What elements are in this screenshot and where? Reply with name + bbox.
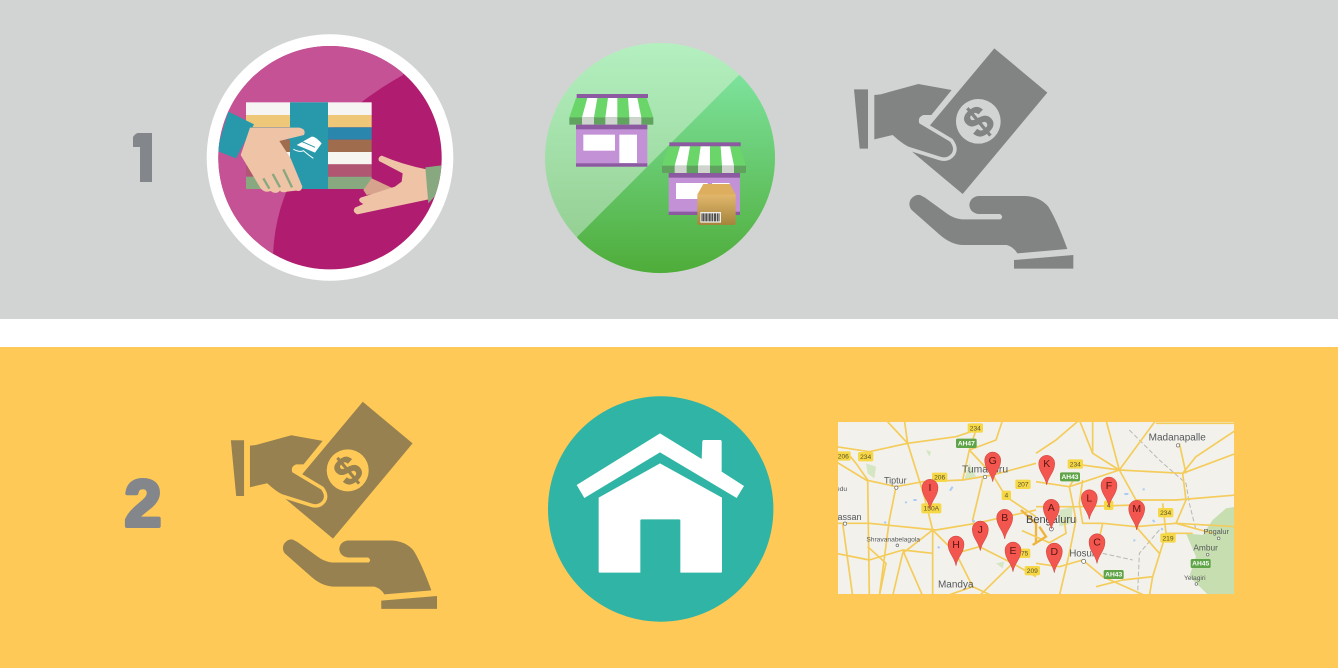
map shields and labels east: Pogalur <box>1204 527 1229 536</box>
map shields and labels west: 209 <box>1027 568 1038 575</box>
map pin B: B <box>1001 512 1008 524</box>
map shields and labels west: AH47 <box>958 441 975 448</box>
map pin M: M <box>1132 503 1141 515</box>
map pin H: H <box>952 539 960 551</box>
map shields and labels west: 234 <box>860 454 872 461</box>
map shields and labels east: AH43 <box>1105 572 1122 579</box>
map shields and labels east: Yelagiri <box>1184 575 1206 582</box>
map shields and labels west: Hassan <box>831 512 861 522</box>
map pin E: E <box>1009 545 1017 557</box>
map shields and labels west: Tumakuru <box>962 464 1008 475</box>
map pin A: A <box>1048 502 1055 514</box>
panel: top grey band <box>0 0 1338 319</box>
step number 1: 1 <box>126 119 164 197</box>
map shields and labels east: Bengaluru <box>1026 514 1076 526</box>
map shields and labels east: 234 <box>1070 461 1081 468</box>
map pin F: F <box>1106 480 1112 492</box>
map shields and labels east: AH45 <box>1192 561 1209 568</box>
map roads east <box>1022 420 1236 596</box>
map shields and labels west: 150A <box>924 506 940 513</box>
storefront: right <box>662 142 746 215</box>
map shields and labels west: 206 <box>838 453 849 460</box>
map pin I: I <box>929 482 931 494</box>
icon: house in teal circle <box>548 396 773 622</box>
map pin J <box>972 521 988 551</box>
parcel with barcode <box>697 184 736 225</box>
map shields and labels west: Mandya <box>938 580 974 591</box>
map shields and labels east <box>1026 433 1229 585</box>
map pin D <box>1046 543 1062 573</box>
icon: money passing between hands (yellow band): $ <box>326 447 371 495</box>
map shields and labels west: 206 <box>934 475 946 482</box>
map roads west <box>836 420 1036 596</box>
map shields and labels west: edu <box>836 486 847 493</box>
storefront: left <box>569 94 653 167</box>
map shields and labels west: Shravanabelagola <box>866 537 920 544</box>
panel: bottom yellow band <box>0 347 1338 668</box>
map pin H <box>948 536 964 566</box>
map pin E <box>1005 542 1021 572</box>
map pin K: K <box>1043 458 1050 470</box>
map shields and labels east: Hosur <box>1069 549 1096 560</box>
map pin K <box>1039 455 1055 485</box>
map shields and labels east: AH43 <box>1061 474 1079 481</box>
map pin B <box>997 509 1013 539</box>
icon: hands exchanging parcel <box>207 34 453 281</box>
map pin F <box>1101 477 1117 507</box>
map shields and labels west: 4 <box>1004 493 1008 500</box>
map pin C <box>1089 534 1105 563</box>
icon: money passing between hands (grey) <box>854 48 1073 269</box>
map shields and labels east: 234 <box>1160 510 1172 517</box>
map shields and labels east: 4 <box>1107 503 1111 510</box>
map: pins across Bengaluru region <box>831 420 1236 596</box>
map shields and labels east: 219 <box>1162 535 1174 542</box>
map pin L: L <box>1086 493 1092 505</box>
icon: money passing between hands (yellow band) <box>231 402 437 609</box>
map shields and labels west: 207 <box>1017 482 1029 489</box>
map pin M <box>1129 500 1145 530</box>
map pin C: C <box>1093 537 1101 549</box>
map shields and labels east: Madanapalle <box>1149 433 1206 444</box>
map shields and labels west: Tiptur <box>884 475 907 485</box>
map shields and labels west: 75 <box>1021 551 1029 558</box>
map pin I <box>922 479 938 509</box>
icon: two storefronts with parcel <box>545 43 775 273</box>
map pin G: G <box>989 455 997 467</box>
map pin G <box>985 452 1001 482</box>
step number 2: 2 <box>125 466 161 540</box>
map shields and labels west: 234 <box>970 425 981 432</box>
map shields and labels east: Ambur <box>1193 543 1218 553</box>
map pin J: J <box>978 524 983 536</box>
map shields and labels west <box>831 423 1040 591</box>
map pin D: D <box>1051 546 1059 558</box>
map pin A <box>1043 499 1059 529</box>
map pin L <box>1081 490 1097 519</box>
icon: money passing between hands (grey): $ <box>954 96 1004 148</box>
